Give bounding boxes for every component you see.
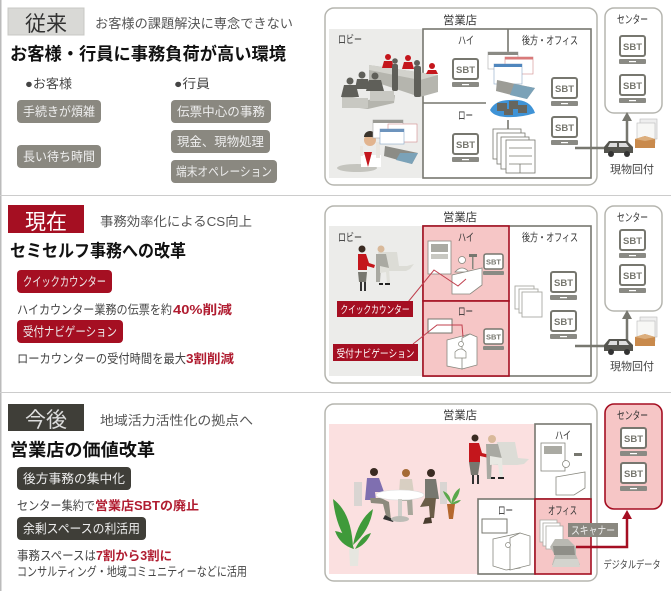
illustration: lobby counter and people: [341, 54, 438, 109]
staff column: [171, 77, 277, 183]
badge: 今後: 今後: [25, 409, 67, 432]
office room: [535, 499, 591, 574]
illustration: staff assisting customer: [358, 246, 414, 291]
panel: 現在 text: [8, 205, 252, 366]
icon: SBT terminal office 2: SBT: [554, 317, 573, 328]
center box: センター: [617, 13, 648, 26]
surplus space item: 余剰スペースの利活用: [23, 522, 140, 536]
surplus space item: 7割から3割に: [96, 548, 172, 563]
highlighted high and low rooms: [423, 226, 509, 376]
heading: お客様・行員に事務負荷が高い環境: [10, 44, 286, 64]
room labels: ロー: [458, 110, 473, 122]
staff column: 現金、現物処理: [177, 135, 264, 149]
reception navigation item: 受付ナビゲーション: [23, 325, 117, 339]
illustration: paper stack: [493, 129, 535, 173]
subtitle: 事務効率化によるCS向上: [100, 214, 252, 229]
label: quick counter: [337, 301, 413, 317]
lobby area: [329, 29, 423, 178]
illustration: large plant: [333, 499, 373, 566]
arrow: physical delivery: [575, 120, 627, 148]
panel: 今後 text: [8, 404, 253, 579]
badge: 現在: 現在: [25, 211, 67, 234]
branch title: 営業店: [443, 13, 477, 27]
high room: [535, 424, 591, 499]
center box highlighted: SBT: [624, 434, 643, 445]
illustration: group at round table: [354, 468, 447, 524]
illustration: small plant: [443, 488, 461, 519]
badge: 現在: [8, 205, 84, 234]
illustration: car and box: [604, 119, 657, 157]
room labels: ハイ: [458, 35, 474, 47]
icon: SBT terminal office 1: SBT: [554, 278, 573, 289]
illustration: self-service counter: [428, 241, 482, 294]
room labels: ロビー: [338, 33, 362, 46]
center box: SBT: [623, 81, 642, 92]
quick counter item: [17, 270, 233, 317]
surplus space item: [17, 517, 247, 579]
icon: SBT terminal high: [452, 59, 479, 87]
icon: SBT terminal office 1: [550, 272, 577, 300]
center box: センター: [617, 211, 648, 224]
icon: SBT terminal high: SBT: [456, 65, 475, 76]
staff column: 端末オペレーション: [176, 165, 272, 179]
branch outline: [325, 404, 597, 581]
callout line: quick counter: [408, 270, 466, 302]
back-office item: 後方事務の集中化: [23, 471, 125, 486]
icon: SBT terminal office 1: [551, 78, 578, 106]
panel: 現在 diagram: [325, 206, 662, 383]
illustration: worried staff with forms: [337, 120, 418, 172]
back-office item: センター集約で: [17, 498, 95, 513]
low room: ロー: [498, 505, 513, 517]
office room: オフィス: [548, 504, 577, 517]
customer column: ●お客様: [25, 76, 73, 91]
center box: SBT: [623, 271, 642, 282]
back-office item: 営業店SBTの廃止: [95, 498, 199, 513]
callout line: reception navigation: [413, 325, 463, 344]
label: scanner: スキャナー: [571, 524, 615, 537]
arrow: digital data: [576, 518, 627, 547]
label: reception navigation: 受付ナビゲーション: [336, 347, 414, 360]
branch title: 営業店: [443, 210, 477, 224]
arrow: physical delivery: [575, 318, 627, 346]
staff column: ●行員: [174, 77, 211, 91]
icon: SBT small low: [483, 329, 504, 350]
arrowhead: [622, 112, 632, 121]
reception navigation item: ローカウンターの受付時間を最大: [17, 352, 186, 366]
icon: SBT terminal office 2: [551, 117, 578, 145]
label: reception navigation: [333, 344, 418, 361]
illustration: staff assisting customer: [469, 434, 529, 484]
branch title: 営業店: [443, 408, 477, 422]
customer column: [17, 76, 101, 168]
center box: [605, 206, 662, 311]
heading: 営業店の価値改革: [10, 440, 155, 460]
icon: SBT terminal low: [452, 134, 479, 162]
room labels: [338, 230, 578, 318]
room labels: ロー: [458, 306, 473, 318]
badge: 今後: [8, 404, 84, 432]
center box: [605, 8, 662, 113]
label: physical delivery: 現物回付: [610, 162, 654, 176]
center box: SBT: [623, 42, 642, 53]
icon: SBT small low: SBT: [486, 332, 501, 342]
room labels: [338, 33, 578, 122]
illustration: forms, cards and cash: [488, 52, 535, 117]
center box: SBT: [623, 236, 642, 247]
arrowhead: [622, 510, 632, 519]
icon: SBT small high: SBT: [486, 258, 501, 266]
back-office item: [17, 467, 199, 513]
illustration: car and box: [604, 317, 657, 355]
label: quick counter: クイックカウンター: [340, 304, 410, 316]
surplus space item: コンサルティング・地域コミュニティーなどに活用: [17, 565, 247, 579]
rooms frame: [423, 226, 591, 376]
room labels: 後方・オフィス: [522, 230, 578, 244]
icon: SBT terminal office 2: SBT: [555, 123, 574, 134]
branch outline: [325, 206, 597, 383]
staff column: 伝票中心の事務: [177, 104, 265, 119]
high room: ハイ: [555, 430, 571, 442]
room labels: 後方・オフィス: [522, 33, 578, 47]
panel: 今後 diagram: [325, 404, 662, 581]
reception navigation item: 3割削減: [186, 351, 235, 366]
icon: SBT terminal office 1: SBT: [555, 84, 574, 95]
center box highlighted: [605, 404, 662, 509]
label: physical delivery: 現物回付: [610, 359, 654, 373]
icon: SBT small high: [483, 254, 504, 275]
quick counter item: 40%削減: [173, 302, 233, 317]
quick counter item: ハイカウンター業務の伝票を約: [17, 302, 172, 317]
room labels: ロビー: [338, 231, 362, 244]
subtitle: 地域活力活性化の拠点へ: [100, 413, 253, 428]
icon: SBT terminal office 2: [550, 311, 577, 339]
surplus space item: 事務スペースは: [17, 549, 96, 563]
reception navigation item: [17, 320, 235, 366]
heading: セミセルフ事務への改革: [10, 241, 186, 261]
panel: 従来 text: [8, 8, 293, 183]
center box highlighted: センター: [617, 409, 648, 422]
icon: SBT terminal low: SBT: [456, 140, 475, 151]
panel: 従来 diagram: [325, 8, 662, 185]
badge: 従来: 従来: [25, 13, 67, 36]
quick counter item: クイックカウンター: [23, 275, 106, 289]
illustration: low booth: [428, 319, 477, 369]
branch outline: [325, 8, 597, 185]
arrowhead: [622, 310, 632, 319]
center box highlighted: SBT: [624, 469, 643, 480]
low room: [478, 499, 535, 574]
badge: 従来: [8, 8, 84, 36]
subtitle: お客様の課題解決に専念できない: [95, 16, 293, 31]
room labels: ハイ: [458, 232, 474, 244]
lobby area: [329, 226, 423, 376]
rooms frame: [423, 29, 591, 178]
customer column: 長い待ち時間: [23, 150, 95, 164]
lobby area: [329, 424, 591, 574]
illustration: paper stack: [515, 286, 542, 317]
customer column: 手続きが煩雑: [23, 104, 95, 119]
